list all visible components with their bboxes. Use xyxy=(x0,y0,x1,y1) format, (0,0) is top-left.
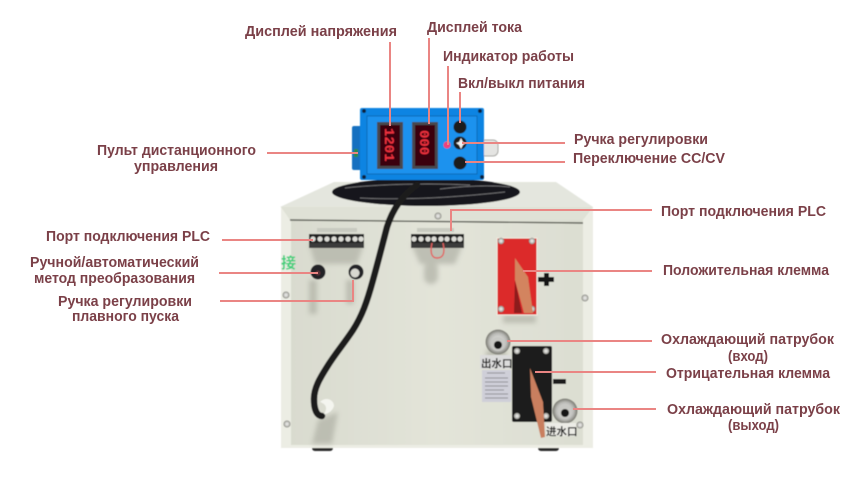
soft start knob xyxy=(348,264,364,280)
power cable xyxy=(314,185,417,416)
manual/auto switch xyxy=(310,264,326,280)
left terminal block xyxy=(309,228,364,248)
power switch xyxy=(454,120,466,134)
current display: 000 xyxy=(415,130,431,155)
positive terminal plate xyxy=(497,238,537,315)
label: soft start knob: плавного пуска xyxy=(72,309,180,325)
label: remote control xyxy=(97,143,256,175)
leader lines xyxy=(219,38,656,409)
cabinet inner panel xyxy=(281,207,593,445)
CC/CV switch xyxy=(454,156,466,170)
label: CC/CV switch: Переключение CC/CV xyxy=(573,151,725,167)
panel shadows xyxy=(309,244,536,444)
label: adjustment knob: Ручка регулировки xyxy=(574,132,708,148)
label: manual/auto method: метод преобразования xyxy=(34,271,195,287)
label: cooling pipe inlet: Охлаждающий патрубок xyxy=(661,332,835,348)
labels xyxy=(30,20,841,434)
power supply cabinet xyxy=(280,108,593,451)
label: current display: Дисплей тока xyxy=(427,20,523,36)
remote control box xyxy=(352,108,484,180)
voltage display: 1201 xyxy=(380,128,396,162)
work indicator xyxy=(444,142,450,148)
label: remote control: управления xyxy=(134,159,218,175)
water outlet label: 出水口 xyxy=(481,357,512,370)
negative terminal plate xyxy=(512,346,552,438)
adjustment knob xyxy=(454,136,466,150)
red wire jumper xyxy=(431,243,444,258)
cooling pipe inlet xyxy=(486,330,510,354)
label: power on/off: Вкл/выкл питания xyxy=(458,76,585,92)
label: cooling pipe inlet xyxy=(661,332,835,365)
cabinet front face xyxy=(281,207,593,448)
label: positive terminal: Положительная клемма xyxy=(663,263,830,279)
label: remote control: Пульт дистанционного xyxy=(97,143,256,159)
label: PLC port right: Порт подключения PLC xyxy=(661,204,827,220)
nameplate xyxy=(482,370,511,402)
label: cooling pipe outlet: Охлаждающий патрубок xyxy=(667,402,841,418)
label: cooling pipe outlet xyxy=(667,402,841,434)
label: work indicator: Индикатор работы xyxy=(443,49,574,65)
minus sign xyxy=(553,379,566,384)
cooling pipe outlet xyxy=(552,398,578,424)
label: negative terminal: Отрицательная клемма xyxy=(666,366,831,382)
label: soft start knob: Ручка регулировки xyxy=(58,294,192,310)
plus sign xyxy=(538,273,554,286)
cabinet feet xyxy=(312,444,559,451)
label: cooling pipe inlet: (вход) xyxy=(728,349,768,365)
screws xyxy=(282,212,588,428)
control box handle xyxy=(480,140,498,156)
cable coil xyxy=(332,178,520,206)
cabinet top face xyxy=(280,182,593,207)
label: cooling pipe outlet: (выход) xyxy=(728,418,779,434)
label: manual/auto method: Ручной/автоматический xyxy=(30,255,199,271)
label: manual/auto method xyxy=(30,255,199,287)
label: soft start knob xyxy=(58,294,192,325)
green label: 接 xyxy=(281,255,296,272)
right terminal block xyxy=(411,228,464,248)
label: voltage display: Дисплей напряжения xyxy=(245,24,397,40)
label: PLC port left: Порт подключения PLC xyxy=(46,229,211,245)
water inlet label: 进水口 xyxy=(546,425,578,438)
cable end highlight xyxy=(320,399,334,414)
